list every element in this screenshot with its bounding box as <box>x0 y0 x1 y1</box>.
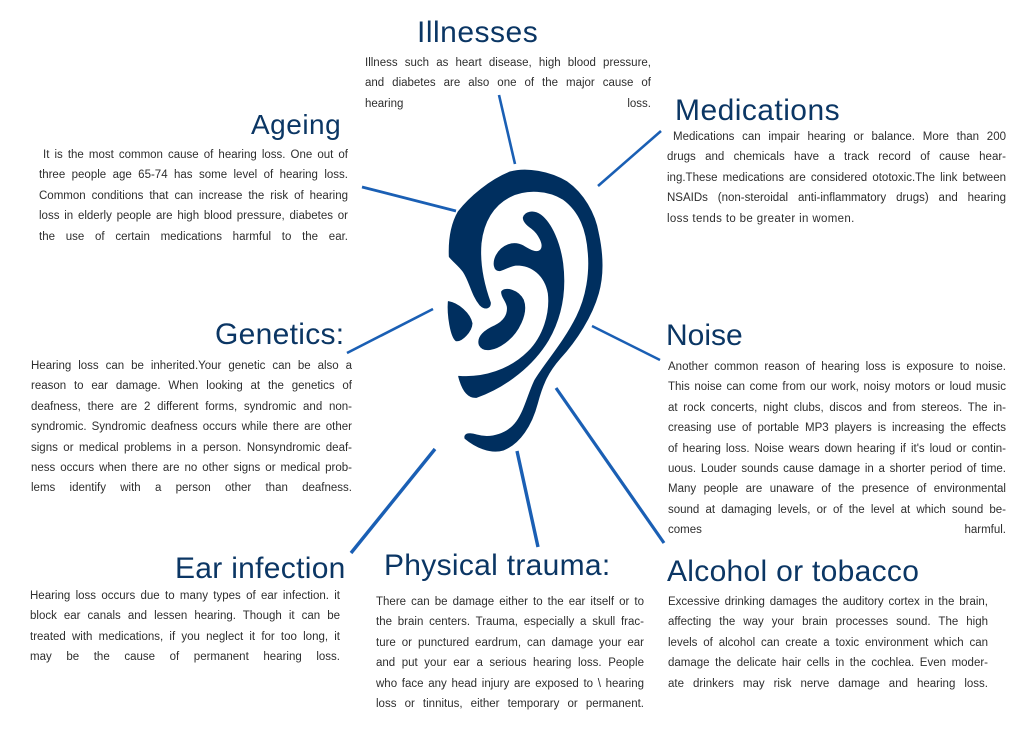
heading: Alcohol or tobacco: Alcohol or tobacco <box>667 555 919 588</box>
ear: inner concha <box>479 289 525 350</box>
text block: Physical trauma: who face any head injury are exposed to \ hearing <box>376 678 644 690</box>
text block: Noise: This noise can come from our work, noisy motors or loud music <box>668 381 1006 393</box>
text block: Noise: of hearing loss. Noise wears down hearing if it's loud or contin- <box>668 443 1006 455</box>
text block: Genetics: reason to ear damage. When looking at the genetics of <box>31 380 352 392</box>
text block: Illnesses <box>365 57 651 110</box>
text block: Physical trauma: ture or punctured eardrum, can damage your ear <box>376 637 644 649</box>
text block: Genetics: syndromic. Syndromic deafness occurs while there are other <box>31 421 352 433</box>
text block: Alcohol or tobacco: levels of alcohol can create a toxic environment which can <box>668 637 988 649</box>
text block: Ear infection: block ear canals and lessen hearing. Though it can be <box>30 610 340 622</box>
text block: Medications: ing.These medications are considered ototoxic.The link between <box>667 172 1006 184</box>
heading: Ageing: Ageing <box>251 109 341 140</box>
text block: Ageing: Common conditions that can increase the risk of hearing <box>39 190 348 202</box>
text block: Alcohol or tobacco <box>668 596 988 690</box>
text block: Physical trauma: and put your ear a serious hearing loss. People <box>376 657 644 669</box>
heading: Medications: Medications <box>675 94 840 127</box>
text block: Noise: Many people are unaware of the presence of environmental <box>668 483 1006 495</box>
text block: Genetics <box>31 360 352 494</box>
text block: Noise: sound at damaging levels, or of the level at which sound be- <box>668 504 1006 516</box>
text block: Alcohol or tobacco: Excessive drinking damages the auditory cortex in the brain, <box>668 596 988 608</box>
heading: Illnesses: Illnesses <box>417 16 538 49</box>
arrow: medications <box>598 131 661 186</box>
text block: Alcohol or tobacco: damage the delicate hair cells in the cochlea. Even moder- <box>668 657 988 669</box>
text block: Illnesses: hearing loss. <box>365 98 651 110</box>
text block: Physical trauma: the brain centers. Trauma, especially a skull frac- <box>376 616 644 628</box>
text block: Noise: Another common reason of hearing loss is exposure to noise. <box>668 361 1006 373</box>
heading: Physical trauma: Physical trauma: <box>384 549 611 582</box>
text block: Noise: at rock concerts, night clubs, discos and from stereos. The in- <box>668 402 1006 414</box>
text block: Medications: drugs and chemicals have a track record of cause hear- <box>667 151 1006 163</box>
arrow: illnesses <box>499 95 515 164</box>
text block: Ear infection: Hearing loss occurs due to many types of ear infection. it <box>30 590 340 602</box>
text block: Physical trauma <box>376 596 644 710</box>
icon: ear <box>448 170 602 451</box>
text block: Ageing: It is the most common cause of hearing loss. One out of <box>43 149 348 161</box>
text block: Genetics: deafness, there are 2 different forms, syndromic and non- <box>31 401 352 413</box>
arrow: genetics <box>347 309 433 353</box>
text block: Genetics: Hearing loss can be inherited.Your genetic can be also a <box>31 360 352 372</box>
arrow: noise <box>592 326 660 360</box>
text block: Medications: loss tends to be greater in women. <box>667 213 855 225</box>
heading: Noise: Noise <box>666 319 743 352</box>
heading: Ear infection: Ear infection <box>175 552 346 585</box>
text block: Noise: uous. Louder sounds cause damage in a shorter period of time. <box>668 463 1006 475</box>
text block: Genetics: ness occurs when there are no other signs or medical prob- <box>31 462 352 474</box>
text block: Ageing: loss in elderly people are high blood pressure, diabetes or <box>39 210 348 222</box>
text block: Noise <box>668 361 1006 536</box>
text block: Ear infection: may be the cause of permanent hearing loss. <box>30 651 340 663</box>
text block: Illnesses: and diabetes are also one of the major cause of <box>365 77 651 89</box>
ear: outer helix and lobe <box>449 170 602 451</box>
text block: Ear infection <box>30 590 340 663</box>
text block: Genetics: signs or medical problems in a person. Nonsyndromic deaf- <box>31 442 352 454</box>
text block: Alcohol or tobacco: affecting the way your brain processes sound. The high <box>668 616 988 628</box>
text block: Ageing: the use of certain medications harmful to the ear. <box>39 231 348 243</box>
heading: Genetics: Genetics: <box>215 318 344 351</box>
ear: antihelix <box>459 212 564 397</box>
text block: Ear infection: treated with medications, if you neglect it for too long, it <box>30 631 340 643</box>
text block: Ageing <box>39 149 348 243</box>
arrow: ear infection <box>351 449 435 553</box>
text block: Medications: Medications can impair hearing or balance. More than 200 <box>673 131 1006 143</box>
text block: Noise: comes harmful. <box>668 524 1006 536</box>
text block: Medications: NSAIDs (non-steroidal anti-inflammatory drugs) and hearing <box>667 192 1006 204</box>
text block: Ageing: three people age 65-74 has some level of hearing loss. <box>39 169 348 181</box>
ear: tragus <box>448 302 472 341</box>
arrow: physical trauma <box>517 451 538 547</box>
text block: Physical trauma: loss or tinnitus, either temporary or permanent. <box>376 698 644 710</box>
text block: Illnesses: Illness such as heart disease, high blood pressure, <box>365 57 651 69</box>
text block: Genetics: lems identify with a person other than deafness. <box>31 482 352 494</box>
arrow: alcohol or tobacco <box>556 388 664 543</box>
text block: Noise: creasing use of portable MP3 players is increasing the effects <box>668 422 1006 434</box>
arrow: ageing <box>362 187 456 211</box>
text block: Physical trauma: There can be damage either to the ear itself or to <box>376 596 644 608</box>
text block: Alcohol or tobacco: ate drinkers may risk nerve damage and hearing loss. <box>668 678 988 690</box>
text block: Medications <box>667 131 1006 225</box>
